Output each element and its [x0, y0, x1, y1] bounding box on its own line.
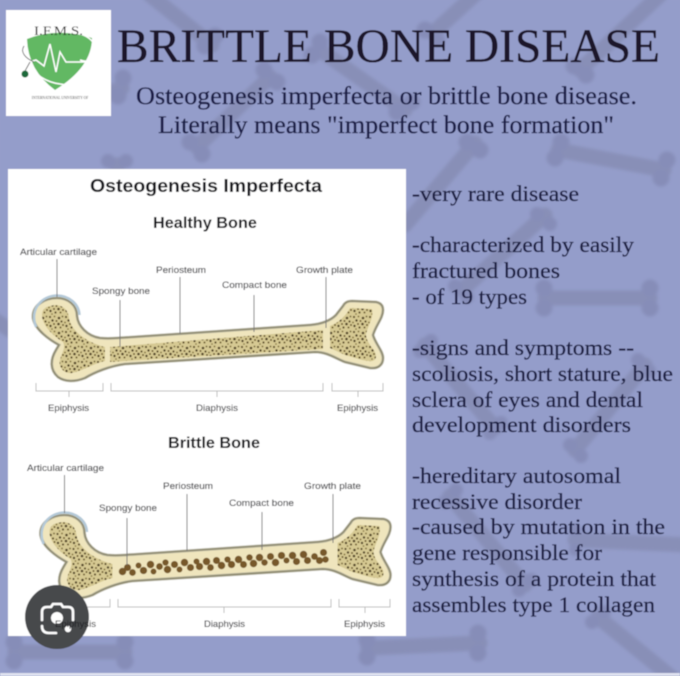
text block: cause: [412, 463, 665, 617]
text block: signs and symptoms: scoliosis, short stature, blue: [412, 361, 673, 386]
brittle bone enlarged pores: [120, 550, 328, 575]
bottom labels: [55, 619, 385, 630]
bottom labels: Diaphysis: [204, 619, 245, 630]
brittle bone labels: Growth plate: [304, 481, 361, 492]
healthy bone labels: Spongy bone: [92, 286, 150, 297]
panel: bone diagram: [8, 169, 406, 636]
text block: rarity: -very rare disease: [412, 181, 579, 206]
lens search badge: [25, 585, 89, 649]
bottom edge strip: [0, 673, 680, 676]
text block: characteristics: fractured bones: [412, 258, 560, 283]
bottom labels: Epiphysis: [55, 619, 96, 630]
healthy bone illustration: [33, 296, 383, 381]
text block: signs and symptoms: -signs and symptoms --: [412, 335, 634, 360]
logo caption: INTERNATIONAL UNIVERSITY OF: [32, 96, 88, 100]
brittle bone region brackets: [43, 599, 390, 613]
brittle bone labels: Spongy bone: [99, 503, 157, 514]
subtitle: Literally means "imperfect bone formation": [158, 112, 614, 139]
logo stethoscope end: [22, 70, 28, 78]
brittle bone labels: Periosteum: [163, 481, 213, 492]
brittle bone labels: Compact bone: [229, 498, 294, 509]
text block: cause: -caused by mutation in the: [412, 514, 665, 539]
brittle bone heading: Brittle Bone: [168, 435, 260, 452]
healthy bone labels: Compact bone: [222, 280, 287, 291]
text block: signs and symptoms: [412, 335, 673, 437]
healthy bone labels: [20, 247, 353, 347]
brittle bone illustration: [40, 512, 390, 598]
text block: cause: assembles type 1 collagen: [412, 592, 655, 617]
text block: signs and symptoms: sclera of eyes and dental: [412, 387, 643, 412]
logo: [6, 10, 111, 116]
healthy bone region brackets: Epiphysis: [337, 403, 378, 414]
text block: signs and symptoms: development disorders: [412, 412, 631, 437]
badge camera icon: [42, 604, 73, 633]
healthy bone labels: Growth plate: [296, 265, 353, 276]
text block: characteristics: - of 19 types: [412, 284, 527, 309]
text block: characteristics: -characterized by easily: [412, 232, 634, 257]
text block: cause: recessive disorder: [412, 489, 583, 514]
healthy bone heading: Healthy Bone: [153, 215, 257, 232]
healthy bone region brackets: Epiphysis: [48, 403, 89, 414]
brittle bone labels: Articular cartilage: [27, 463, 104, 474]
logo initials: I.F.M.S.: [34, 24, 83, 38]
text block: cause: -hereditary autosomal: [412, 463, 621, 488]
text block: cause: gene responsible for: [412, 540, 603, 565]
logo shield: [27, 33, 92, 90]
bottom labels: Epiphysis: [344, 619, 385, 630]
subtitle: [136, 83, 637, 139]
brittle bone labels: [27, 463, 361, 565]
healthy bone labels: Articular cartilage: [20, 247, 97, 258]
healthy bone region brackets: [36, 383, 383, 414]
subtitle: Osteogenesis imperfecta or brittle bone disease.: [136, 83, 637, 110]
title: BRITTLE BONE DISEASE: [117, 21, 660, 73]
text block: characteristics: [412, 232, 634, 309]
diagram heading: Osteogenesis Imperfecta: [90, 176, 323, 196]
healthy bone region brackets: Diaphysis: [196, 403, 238, 414]
healthy bone labels: Periosteum: [156, 265, 206, 276]
text block: cause: synthesis of a protein that: [412, 566, 656, 591]
